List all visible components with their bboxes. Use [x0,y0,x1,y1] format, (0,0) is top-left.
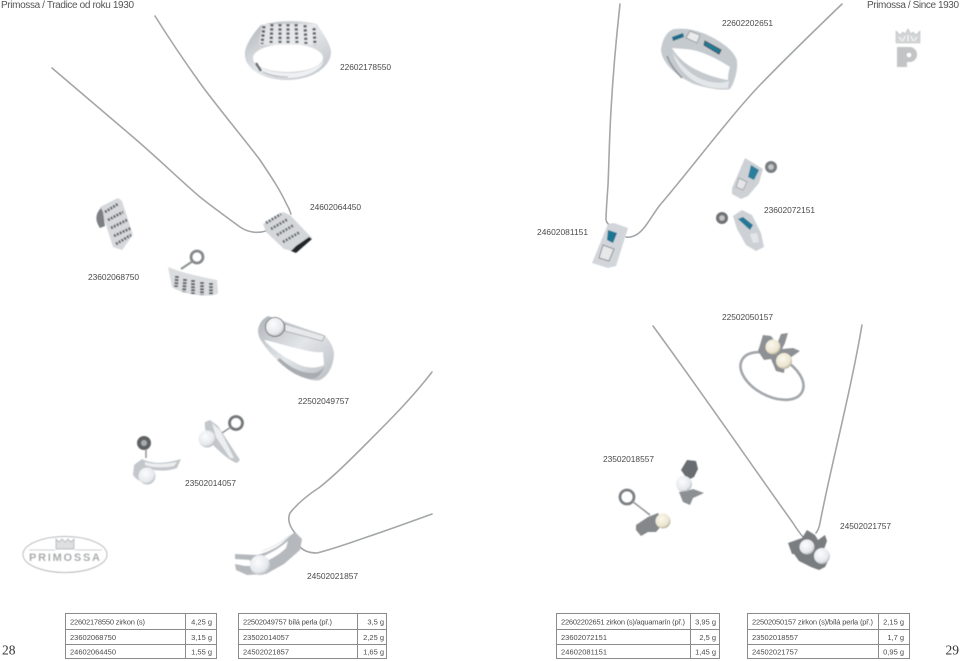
ring 22502049757 [258,316,334,381]
table: 22602202651 set: 23602072151 [561,633,607,642]
pendant [235,532,302,575]
product code labels: 24502021857 [307,571,358,581]
product code labels: 22502049757 [298,396,349,406]
table: 22502049757 set: 3,5 g [367,618,384,626]
product code labels: 22502050157 [722,312,773,322]
table: 22602178550 set: 22602178550 zirkon (s) [70,618,146,626]
table: 22602178550 set: 24602064450 [70,648,116,656]
product code labels: 24502021757 [840,521,891,531]
table: 22502050157 set: 24502021757 [752,648,798,656]
table: 22602202651 set: 1,45 g [695,648,716,656]
product code labels: 23602072151 [764,205,815,215]
header: right page: Primossa / Since 1930 [867,0,959,11]
table: 22502050157 set: 1,7 g [887,633,904,642]
logo: Primossa oval [23,536,107,572]
table: 22502049757 set: 2,25 g [363,633,384,642]
page number 28: 28 [2,642,16,658]
necklace 24502021857 [235,372,432,575]
earrings 23502014057 [133,416,242,484]
table: 22502049757 set: 1,65 g [363,648,384,656]
table: 22602178550 set: 3,15 g [191,633,212,642]
page number 29: 29 [946,642,959,658]
necklace 24602064450 [52,16,312,253]
table: 22602202651 set: 3,95 g [695,618,716,626]
pendant [592,223,628,268]
table: 22502050157 set: 23502018557 [752,633,798,642]
table: 22602178550 set [65,613,216,658]
table: 22602202651 set [556,613,720,658]
table: 22602178550 set: 4,25 g [191,618,212,626]
icon: crown and P brand mark [896,29,920,67]
table: 22602202651 set: 2,5 g [699,633,716,642]
table: 22502049757 set [238,613,386,658]
ring 22602202651 [661,29,737,90]
table: 22502050157 set: 0,95 g [883,648,904,656]
ring 22502050157 [733,333,811,410]
table: 22602178550 set: 1,55 g [191,648,212,656]
necklace 24502021757 [653,325,862,570]
header: left page: Primossa / Tradice od roku 1930 [1,0,134,11]
earrings 23602068750 [96,198,218,296]
product code labels: 23602068750 [88,272,139,282]
pendant [788,530,830,570]
pendant [263,212,312,253]
table: 22502050157 set: 2,15 g [883,618,904,626]
table: 22502050157 set [747,613,910,658]
product code labels: 22602178550 [340,62,391,72]
table: 22502049757 set: 22502049757 bílá perla (př.) [243,618,332,626]
product code labels: 22602202651 [722,18,773,28]
table: 22602202651 set: 24602081151 [561,648,607,656]
product code labels: 24602081151 [537,227,588,237]
product code labels: 23502018557 [603,454,654,464]
product code labels: 23502014057 [185,478,236,488]
product code labels [88,18,891,581]
earrings 23602072151 [716,158,777,251]
product code labels: 24602064450 [310,202,361,212]
logo: Primossa oval: PRIMOSSA [29,552,100,564]
table: 22502050157 set: 22502050157 zirkon (s)/bílá perla (př.) [752,618,874,626]
table: 22602178550 set: 23602068750 [70,633,116,642]
ring 22602178550 [245,21,331,80]
earrings 23502018557 [620,460,704,536]
necklace 24602081151 [592,4,842,268]
table: 22502049757 set: 23502014057 [243,633,289,642]
table: 22502049757 set: 24502021857 [243,648,289,656]
table: 22602202651 set: 22602202651 zirkon (s)/aquamarín (př.) [561,618,686,626]
